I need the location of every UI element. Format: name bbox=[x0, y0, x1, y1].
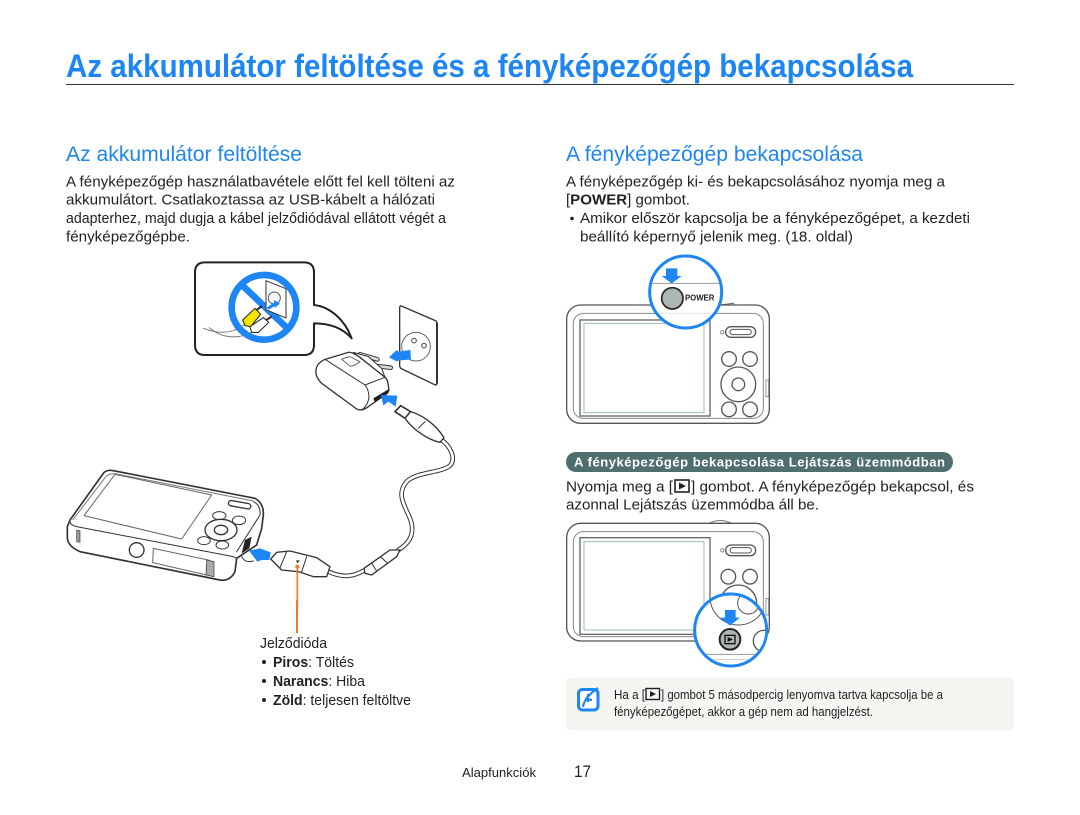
callout circle: power button bbox=[650, 256, 723, 328]
diode indicator line bbox=[295, 565, 299, 612]
diode status list bbox=[260, 636, 411, 709]
text block: playback instructions: azonnal Lejátszás üzemmódba áll be. bbox=[566, 498, 819, 514]
arrow: into camera bbox=[249, 548, 271, 562]
camera back bbox=[567, 520, 769, 641]
note text bbox=[614, 688, 943, 719]
footer: page label: Alapfunkciók bbox=[462, 765, 536, 780]
text block: charging instructions: A fényképezőgép használatbavétele előtt fel kell tölteni az bbox=[66, 174, 455, 190]
note text: fényképezőgépet, akkor a gép nem ad hangjelzést. bbox=[614, 705, 873, 719]
footer: page number: 17 bbox=[574, 762, 591, 781]
charging illustration bbox=[67, 262, 453, 612]
callout: do not use AV cable bbox=[195, 262, 352, 355]
subheading pill: playback mode: A fényképezőgép bekapcsolása Lejátszás üzemmódban bbox=[574, 454, 945, 470]
diode status list: Piros: Töltés bbox=[273, 655, 354, 671]
note text: Ha a [ bbox=[614, 688, 645, 702]
text block: power instructions: beállító képernyő jelenik meg. (18. oldal) bbox=[580, 230, 853, 246]
heading: turning on: A fényképezőgép bekapcsolása bbox=[566, 143, 863, 166]
icon: power adapter bbox=[316, 352, 391, 410]
text block: power instructions: Amikor először kapcsolja be a fényképezőgépet, a kezdeti bbox=[580, 211, 970, 227]
text block: playback instructions: ] gombot. A fényképezőgép bekapcsol, és bbox=[691, 480, 974, 496]
text block: charging instructions bbox=[66, 174, 455, 246]
indicator line to diode label bbox=[296, 600, 298, 633]
heading: charging: Az akkumulátor feltöltése bbox=[66, 143, 302, 166]
panel: charging the battery bbox=[66, 143, 455, 709]
text block: power instructions: [POWER] gombot. bbox=[566, 192, 690, 208]
title: Az akkumulátor feltöltése és a fényképezőgép bekapcsolása bbox=[66, 48, 913, 84]
text block: charging instructions: adapterhez, majd dugja a kábel jelződiódával ellátott végét a bbox=[66, 211, 447, 227]
USB cable bbox=[271, 406, 453, 577]
text block: playback instructions bbox=[566, 480, 974, 514]
callout circle: playback button bbox=[693, 592, 768, 668]
text block: playback instructions: Nyomja meg a [ bbox=[566, 480, 673, 496]
icon: wall socket bbox=[400, 306, 437, 385]
diode status list: Narancs: Hiba bbox=[273, 674, 366, 690]
camera with power button callout bbox=[567, 256, 769, 423]
diode status list: Zöld: teljesen feltöltve bbox=[273, 693, 411, 709]
note box bbox=[566, 678, 1014, 730]
diode status list: Jelződióda bbox=[260, 636, 328, 652]
text block: power instructions: A fényképezőgép ki- és bekapcsolásához nyomja meg a bbox=[566, 174, 946, 190]
callout circle: power button: POWER bbox=[685, 293, 715, 303]
camera with playback button callout bbox=[567, 520, 775, 666]
note text: ] gombot 5 másodpercig lenyomva tartva kapcsolja be a bbox=[661, 688, 943, 702]
text block: charging instructions: akkumulátort. Csatlakoztassa az USB-kábelt a hálózati bbox=[66, 192, 435, 208]
text block: power instructions bbox=[566, 174, 970, 246]
camera, rear view bbox=[67, 470, 263, 580]
panel: turning on the camera bbox=[566, 143, 1014, 730]
arrow: into adapter bbox=[381, 395, 397, 407]
icon: note pencil bbox=[578, 688, 598, 710]
camera back bbox=[567, 303, 769, 423]
text block: charging instructions: fényképezőgépbe. bbox=[66, 230, 190, 246]
arrow: into socket bbox=[389, 350, 411, 361]
